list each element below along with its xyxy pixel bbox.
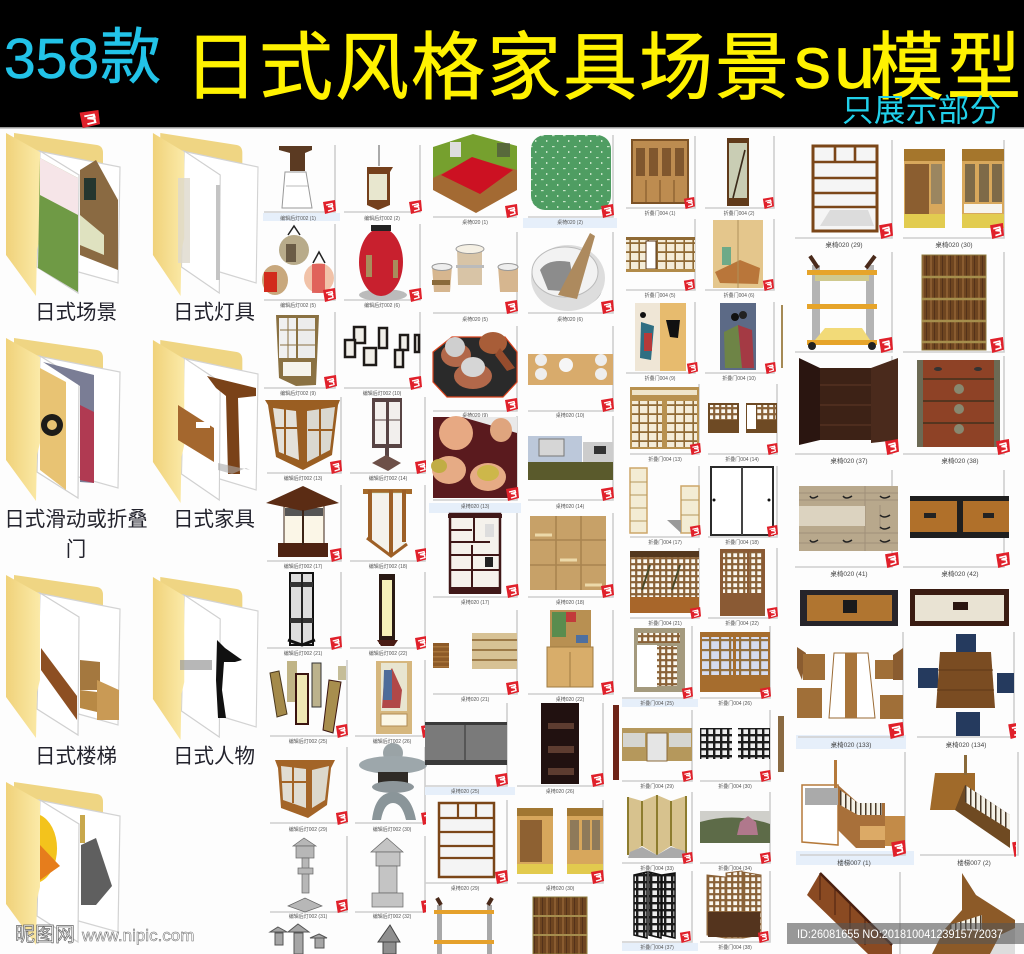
header band [0, 0, 1024, 128]
frames and captions: 桌椅020 (6) [557, 316, 583, 323]
lamp frames and captions: 编辑后灯002 (6) [364, 302, 400, 309]
frames and captions [622, 136, 777, 951]
shrine lamp [279, 146, 312, 208]
lamp frames and captions: 编辑后灯002 (14) [369, 475, 408, 482]
frames and captions: 折叠门004 (38) [718, 944, 752, 951]
frames and captions: 桌椅020 (30) [935, 240, 973, 249]
two-door cabinet [910, 496, 1009, 538]
frames and captions [795, 140, 1018, 954]
cube window lamp [265, 400, 340, 470]
lamp frames and captions: 编辑后灯002 (5) [280, 302, 316, 309]
black screen [634, 872, 675, 938]
chest of drawers [917, 360, 1000, 447]
wooden screen [707, 871, 761, 938]
twin cabinets [517, 808, 603, 874]
frames and captions: 桌椅020 (25) [451, 788, 480, 795]
portrait screen lamp [376, 661, 412, 734]
frames and captions: 折叠门004 (33) [640, 865, 674, 872]
wall with windows [626, 237, 695, 272]
two small shoji sets [708, 403, 777, 433]
main title: 日式风格家具场景 [184, 26, 789, 109]
panel: folders [4, 133, 258, 945]
label: 日式滑动或折叠 [4, 508, 148, 531]
watermark: nipic logo [15, 924, 194, 946]
stair landing right [930, 755, 1010, 848]
stone pillar lantern [288, 838, 322, 912]
frames and captions: 桌椅020 (18) [556, 599, 585, 606]
subtitle: 只展示部分 [842, 92, 1002, 128]
lamp frames and captions: 编辑后灯002 (31) [289, 913, 328, 920]
open dark cabinet [799, 358, 898, 445]
frames and captions: 桌椅020 (29) [451, 885, 480, 892]
frames and captions: 楼梯007 (1) [837, 858, 871, 867]
scattered stools [345, 327, 419, 367]
frames and captions: 折叠门004 (2) [724, 210, 755, 217]
watermark: nipic logo: www.nipic.com [81, 926, 194, 945]
lantern cluster [270, 924, 327, 954]
lamp frames and captions: 编辑后灯002 (21) [284, 650, 323, 657]
frames and captions: 折叠门004 (25) [640, 700, 674, 707]
frames and captions: 折叠门004 (21) [648, 620, 682, 627]
frames and captions: 折叠门004 (10) [722, 375, 756, 382]
wooden window lamp [276, 315, 319, 386]
frames and captions: 桌椅020 (29) [825, 240, 863, 249]
frames and captions: 桌椅020 (1) [462, 219, 488, 226]
red lantern [359, 225, 407, 301]
frames and captions: 桌椅020 (5) [462, 316, 488, 323]
frames and captions: 折叠门004 (29) [640, 783, 674, 790]
tea set on dark red [431, 416, 517, 498]
trolley [807, 256, 877, 350]
lamp frames and captions [263, 145, 425, 920]
lamp frames and captions: 编辑后灯002 (30) [373, 826, 412, 833]
label: 日式楼梯 [35, 745, 117, 768]
frames and captions: 桌椅020 (21) [461, 696, 490, 703]
panel: desks and cabinets thumbnails [425, 134, 619, 954]
frames and captions: 桌椅020 (42) [941, 569, 979, 578]
frames and captions: 桌椅020 (14) [556, 503, 585, 510]
red sliver [613, 705, 619, 780]
frames and captions [425, 135, 617, 892]
blossom shoji [630, 551, 699, 613]
folder: lamps [153, 133, 258, 324]
beige folding screen [628, 795, 686, 858]
post frame lamp [363, 489, 412, 556]
main title: 模型 [870, 26, 1021, 109]
lantern top [378, 925, 400, 954]
shoji double door [630, 387, 699, 449]
folder: scenes [6, 133, 120, 324]
lamp frames and captions: 编辑后灯002 (25) [289, 738, 328, 745]
frames and captions: 折叠门004 (34) [718, 865, 752, 872]
glowing tall lamp [377, 574, 398, 646]
frames and captions: 桌椅020 (13) [461, 503, 490, 510]
frames and captions: 折叠门004 (9) [645, 375, 676, 382]
label: 日式灯具 [173, 301, 255, 324]
frames and captions: 折叠门004 (17) [648, 539, 682, 546]
watermark: id box: ID:26081655 NO:20181004123915772037 [797, 927, 1003, 941]
frames and captions: 桌椅020 (10) [556, 412, 585, 419]
panel: large furniture thumbnails [795, 140, 1024, 954]
frames and captions: 桌椅020 (41) [830, 569, 868, 578]
bookcase hutch [547, 610, 593, 687]
flat drawer cream [910, 589, 1009, 626]
transom door [634, 628, 685, 692]
tatami room [433, 134, 517, 213]
frames and captions: 桌椅020 (134) [946, 740, 986, 749]
lamp frames and captions: 编辑后灯002 (17) [284, 563, 323, 570]
drawer unit [799, 486, 898, 551]
frames and captions: 桌椅020 (37) [830, 456, 868, 465]
lamp frames and captions: 编辑后灯002 (26) [373, 738, 412, 745]
frames and captions: 桌椅020 (17) [461, 599, 490, 606]
frames and captions: 桌椅020 (9) [462, 412, 488, 419]
black tall lamp [288, 573, 315, 645]
lamp frames and captions: 编辑后灯002 (1) [280, 215, 316, 222]
label: 日式家具 [173, 508, 255, 531]
frames and captions: 折叠门004 (30) [718, 783, 752, 790]
black frame sliding door [711, 467, 773, 535]
stone lantern [359, 743, 427, 820]
louvered doors [632, 140, 688, 203]
bookcase bottom [533, 897, 587, 954]
folder: stairs [6, 575, 120, 768]
double cabinet [904, 149, 1004, 228]
lamp frames and captions: 编辑后灯002 (9) [280, 390, 316, 397]
hanging lantern [367, 145, 393, 210]
frames and captions: 折叠门004 (5) [645, 292, 676, 299]
long wall door [622, 728, 692, 761]
lamp group [270, 661, 346, 733]
sliver brown panel [778, 716, 784, 772]
narrow painted door [727, 138, 749, 206]
tea cups [432, 244, 518, 292]
frames and captions: 楼梯007 (2) [957, 858, 991, 867]
watermark: nipic logo: 昵图网 [15, 924, 75, 946]
frames and captions: 折叠门004 (18) [725, 539, 759, 546]
stair with closet [802, 760, 905, 848]
clipped badges [1008, 723, 1016, 857]
lamp frames and captions: 编辑后灯002 (29) [289, 826, 328, 833]
main title: su [794, 21, 875, 104]
badges [879, 223, 1010, 857]
painted folding door [713, 220, 763, 288]
cube window lamp two [275, 760, 335, 818]
three paper lanterns [262, 226, 334, 295]
flat drawer dark [800, 590, 898, 626]
stone block lantern [371, 838, 403, 907]
kitchen counter [528, 436, 613, 480]
frames and captions: 折叠门004 (14) [725, 456, 759, 463]
frames and captions: 桌椅020 (38) [941, 456, 979, 465]
sliver post [781, 305, 783, 368]
wooden shelf [813, 146, 877, 231]
trolley bottom [434, 898, 494, 954]
lamp frames and captions: 编辑后灯002 (18) [369, 563, 408, 570]
lamp frames and captions: 编辑后灯002 (13) [284, 475, 323, 482]
badges [323, 200, 422, 913]
grey sideboard [425, 722, 507, 765]
label: 日式场景 [35, 301, 117, 324]
blue shoji [700, 632, 770, 692]
low shelves [433, 633, 517, 669]
frames and captions: 折叠门004 (22) [725, 620, 759, 627]
lamp frames and captions: 编辑后灯002 (32) [373, 913, 412, 920]
pagoda landscape [700, 811, 770, 843]
tatami strip with cups [528, 354, 613, 385]
frames and captions: 折叠门004 (6) [724, 292, 755, 299]
badges [495, 204, 614, 884]
tan cubby shelf [530, 516, 606, 590]
frames and captions: 桌椅020 (26) [546, 788, 575, 795]
folder: people [153, 577, 258, 768]
lattice door [720, 549, 765, 616]
watermark: id box [787, 923, 1024, 944]
frames and captions: 折叠门004 (13) [648, 456, 682, 463]
sliding doors ajar [630, 468, 699, 533]
frames and captions: 折叠门004 (1) [645, 210, 676, 217]
black lattice pair [700, 728, 770, 759]
frames and captions: 桌椅020 (2) [557, 219, 583, 226]
wood bookcase [922, 255, 986, 350]
lamp frames and captions: 编辑后灯002 (22) [369, 650, 408, 657]
pagoda lamp [266, 486, 339, 557]
frames and captions: 折叠门004 (37) [640, 944, 674, 951]
low table set [797, 647, 903, 719]
label: 日式人物 [173, 745, 255, 768]
dark cabinet [541, 703, 579, 784]
dark stair bottom [807, 873, 892, 954]
curio shelf [448, 514, 502, 594]
square table with cushions [918, 634, 1014, 736]
frames and captions: 折叠门004 (26) [718, 700, 752, 707]
tea tray [433, 332, 517, 397]
frames and captions: 桌椅020 (30) [546, 885, 575, 892]
clipped badges [415, 460, 426, 913]
badges [680, 197, 778, 943]
geisha poster [720, 303, 756, 370]
tall dark lamp [372, 398, 402, 471]
panel: door thumbnails [622, 136, 784, 951]
open wooden shelf [439, 803, 494, 877]
folder: furniture [153, 340, 258, 531]
geisha panels [635, 303, 686, 371]
count heading: 358款 [4, 23, 161, 91]
folder: sliding doors [4, 338, 148, 561]
spiral stair bottom [932, 873, 1015, 954]
frames and captions: 桌椅020 (133) [831, 740, 871, 749]
mortar and pestle [531, 233, 605, 311]
lamp frames and captions: 编辑后灯002 (10) [363, 390, 402, 397]
label line two: 门 [66, 538, 86, 561]
frames and captions: 桌椅020 (22) [556, 696, 585, 703]
panel: lamps thumbnails [262, 145, 434, 954]
lamp frames and captions: 编辑后灯002 (2) [364, 215, 400, 222]
folder: misc [6, 782, 120, 945]
icon: small sketchup badge [80, 110, 100, 128]
green cushion [531, 135, 611, 210]
